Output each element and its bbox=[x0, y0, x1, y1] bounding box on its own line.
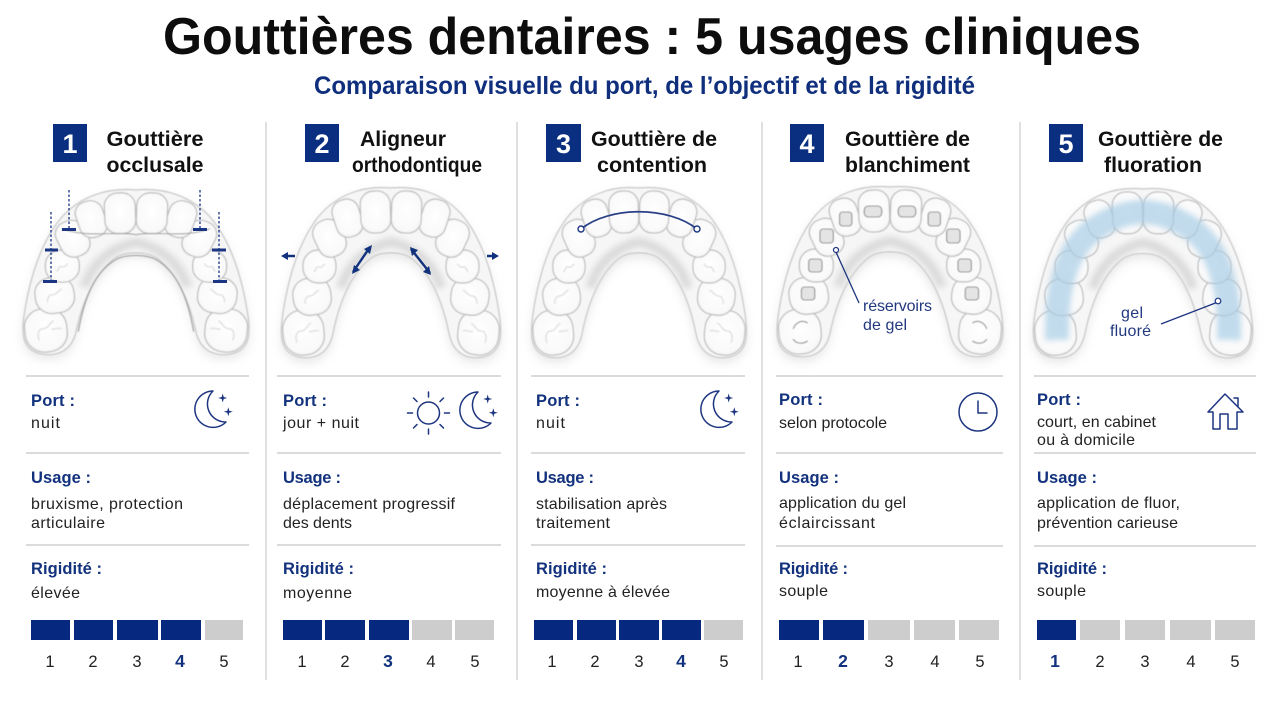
illustration: fluoride tray with gel bbox=[1033, 189, 1253, 363]
row: rigidité 2: Rigidité : bbox=[283, 560, 354, 578]
number badge 2 bbox=[305, 124, 339, 162]
row: usage 4: éclaircissant bbox=[779, 515, 876, 532]
rigidity scale 5: 4 bbox=[1186, 653, 1196, 671]
rigidity scale 1: 1 bbox=[45, 653, 55, 671]
heading 1: Gouttière bbox=[106, 127, 204, 151]
row: usage 3: Usage : bbox=[536, 469, 594, 487]
heading 3: contention bbox=[597, 153, 707, 177]
rigidity scale 4: 1 bbox=[793, 653, 803, 671]
heading 4: Gouttière de bbox=[845, 127, 970, 151]
rigidity scale 3: 5 bbox=[719, 653, 729, 671]
heading 5 bbox=[1098, 127, 1223, 177]
heading 4: blanchiment bbox=[845, 153, 970, 177]
rigidity scale 5: 3 bbox=[1140, 653, 1150, 671]
number badge 4 bbox=[790, 124, 824, 162]
row: port 2 bbox=[282, 392, 360, 432]
icon: moon bbox=[701, 391, 739, 427]
row: port 1: Port : bbox=[31, 392, 75, 410]
rigidity scale 2: 4 bbox=[426, 653, 436, 671]
subtitle: Comparaison visuelle du port, de l’objectif et de la rigidité bbox=[314, 72, 975, 100]
number badge 1 bbox=[53, 124, 87, 162]
row: usage 4: application du gel bbox=[779, 495, 906, 512]
rigidity scale 5: 5 bbox=[1230, 653, 1240, 671]
row: port 5: court, en cabinet bbox=[1037, 414, 1157, 431]
row: port 4: Port : bbox=[779, 391, 823, 409]
row: usage 5: Usage : bbox=[1037, 469, 1097, 487]
rigidity scale 5 bbox=[1037, 620, 1255, 671]
row: rigidité 4: Rigidité : bbox=[779, 560, 848, 578]
illustration: whitening tray with reservoirs bbox=[777, 187, 1003, 362]
number badge 4: 4 bbox=[799, 129, 815, 159]
rigidity scale 1: 5 bbox=[219, 653, 229, 671]
row: port 5: Port : bbox=[1037, 391, 1081, 409]
row: usage 4: Usage : bbox=[779, 469, 839, 487]
row: rigidité 5: souple bbox=[1037, 583, 1086, 600]
illustration: fluoride tray with gel: gel bbox=[1121, 305, 1143, 322]
panel: gouttière de blanchiment bbox=[776, 124, 1003, 671]
row: usage 1 bbox=[31, 469, 183, 532]
rigidity scale 2: 3 bbox=[383, 651, 393, 671]
icon: house bbox=[1208, 394, 1243, 429]
rigidity scale 4: 5 bbox=[975, 653, 985, 671]
row: usage 2 bbox=[283, 469, 456, 532]
heading 1 bbox=[106, 127, 204, 177]
row: usage 3: traitement bbox=[536, 515, 611, 532]
row: rigidité 4: souple bbox=[779, 583, 828, 600]
number badge 3 bbox=[546, 124, 581, 162]
rigidity scale 3: 4 bbox=[676, 651, 686, 671]
row: port 1: nuit bbox=[31, 415, 61, 432]
row: port 2: jour + nuit bbox=[282, 415, 360, 432]
icon: moon bbox=[195, 391, 233, 427]
row: port 2: Port : bbox=[283, 392, 327, 410]
row: port 5 bbox=[1037, 391, 1157, 449]
illustration: whitening tray with reservoirs: de gel bbox=[863, 317, 907, 334]
rigidity scale 2: 5 bbox=[470, 653, 480, 671]
heading 4 bbox=[845, 127, 970, 177]
row: port 4 bbox=[779, 391, 887, 432]
rigidity scale 3: 1 bbox=[547, 653, 557, 671]
title: Gouttières dentaires : 5 usages cliniques bbox=[163, 8, 1141, 66]
row: usage 5: prévention carieuse bbox=[1037, 515, 1178, 532]
illustration: fluoride tray with gel: fluoré bbox=[1110, 323, 1151, 340]
heading 3: Gouttière de bbox=[591, 127, 717, 151]
row: port 3: Port : bbox=[536, 392, 580, 410]
row: usage 2: Usage : bbox=[283, 469, 341, 487]
row: rigidité 5: Rigidité : bbox=[1037, 560, 1107, 578]
heading 3 bbox=[591, 127, 717, 177]
illustration: retainer with wire bbox=[531, 188, 747, 363]
rigidity scale 2: 1 bbox=[297, 653, 307, 671]
row: rigidité 2 bbox=[283, 560, 354, 602]
rigidity scale 5: 1 bbox=[1050, 651, 1060, 671]
row: rigidité 5 bbox=[1037, 560, 1107, 600]
rigidity scale 3: 2 bbox=[590, 653, 600, 671]
rigidity scale 2: 2 bbox=[340, 653, 350, 671]
row: port 3: nuit bbox=[536, 415, 566, 432]
row: port 4: selon protocole bbox=[779, 415, 887, 432]
rigidity scale 5: 2 bbox=[1095, 653, 1105, 671]
row: rigidité 3: Rigidité : bbox=[536, 560, 607, 578]
illustration: aligner with arrows bbox=[281, 188, 501, 363]
heading 2: Aligneur bbox=[360, 127, 447, 151]
row: rigidité 3: moyenne à élevée bbox=[536, 584, 670, 601]
panel: gouttière de contention bbox=[531, 124, 747, 671]
row: rigidité 2: moyenne bbox=[283, 585, 352, 602]
row: usage 5: application de fluor, bbox=[1037, 495, 1180, 512]
heading 2 bbox=[352, 127, 482, 177]
rigidity scale 1: 2 bbox=[88, 653, 98, 671]
row: usage 5 bbox=[1037, 469, 1180, 532]
row: port 5: ou à domicile bbox=[1037, 432, 1135, 449]
row: port 3 bbox=[536, 392, 580, 432]
row: rigidité 1 bbox=[31, 560, 102, 602]
rigidity scale 4: 4 bbox=[930, 653, 940, 671]
rigidity scale 4: 2 bbox=[838, 651, 848, 671]
rigidity scale 3 bbox=[534, 620, 743, 671]
row: rigidité 3 bbox=[536, 560, 670, 601]
row: usage 1: articulaire bbox=[31, 515, 105, 532]
row: rigidité 4 bbox=[779, 560, 848, 600]
row: usage 2: déplacement progressif bbox=[283, 496, 456, 513]
illustration: whitening tray with reservoirs: réservoirs bbox=[863, 298, 932, 315]
heading 5: Gouttière de bbox=[1098, 127, 1223, 151]
panel: aligneur orthodontique bbox=[277, 124, 501, 671]
rigidity scale 2 bbox=[283, 620, 494, 671]
row: usage 4 bbox=[779, 469, 906, 532]
row: rigidité 1: élevée bbox=[31, 585, 80, 602]
row: usage 3: stabilisation après bbox=[536, 496, 667, 513]
rigidity scale 4 bbox=[779, 620, 999, 671]
icon: clock bbox=[959, 393, 997, 431]
number badge 5: 5 bbox=[1058, 129, 1074, 159]
number badge 2: 2 bbox=[314, 129, 330, 159]
row: usage 3 bbox=[536, 469, 667, 532]
row: port 1 bbox=[31, 392, 75, 432]
row: rigidité 1: Rigidité : bbox=[31, 560, 102, 578]
rigidity scale 4: 3 bbox=[884, 653, 894, 671]
icon: sun bbox=[408, 392, 450, 434]
heading 1: occlusale bbox=[106, 153, 204, 177]
row: usage 2: des dents bbox=[283, 515, 352, 532]
row: usage 1: Usage : bbox=[31, 469, 91, 487]
rigidity scale 1: 4 bbox=[175, 651, 185, 671]
number badge 1: 1 bbox=[62, 129, 78, 159]
rigidity scale 1 bbox=[31, 620, 243, 671]
illustration: occlusal splint with measure marks bbox=[23, 190, 249, 359]
number badge 5 bbox=[1049, 124, 1083, 162]
heading 5: fluoration bbox=[1104, 153, 1202, 177]
rigidity scale 1: 3 bbox=[132, 653, 142, 671]
panel: gouttière de fluoration bbox=[1033, 124, 1256, 671]
panel: gouttière occlusale bbox=[23, 124, 249, 671]
rigidity scale 3: 3 bbox=[634, 653, 644, 671]
row: usage 1: bruxisme, protection bbox=[31, 496, 183, 513]
icon: moon bbox=[460, 392, 498, 428]
number badge 3: 3 bbox=[556, 129, 571, 159]
heading 2: orthodontique bbox=[352, 153, 482, 177]
